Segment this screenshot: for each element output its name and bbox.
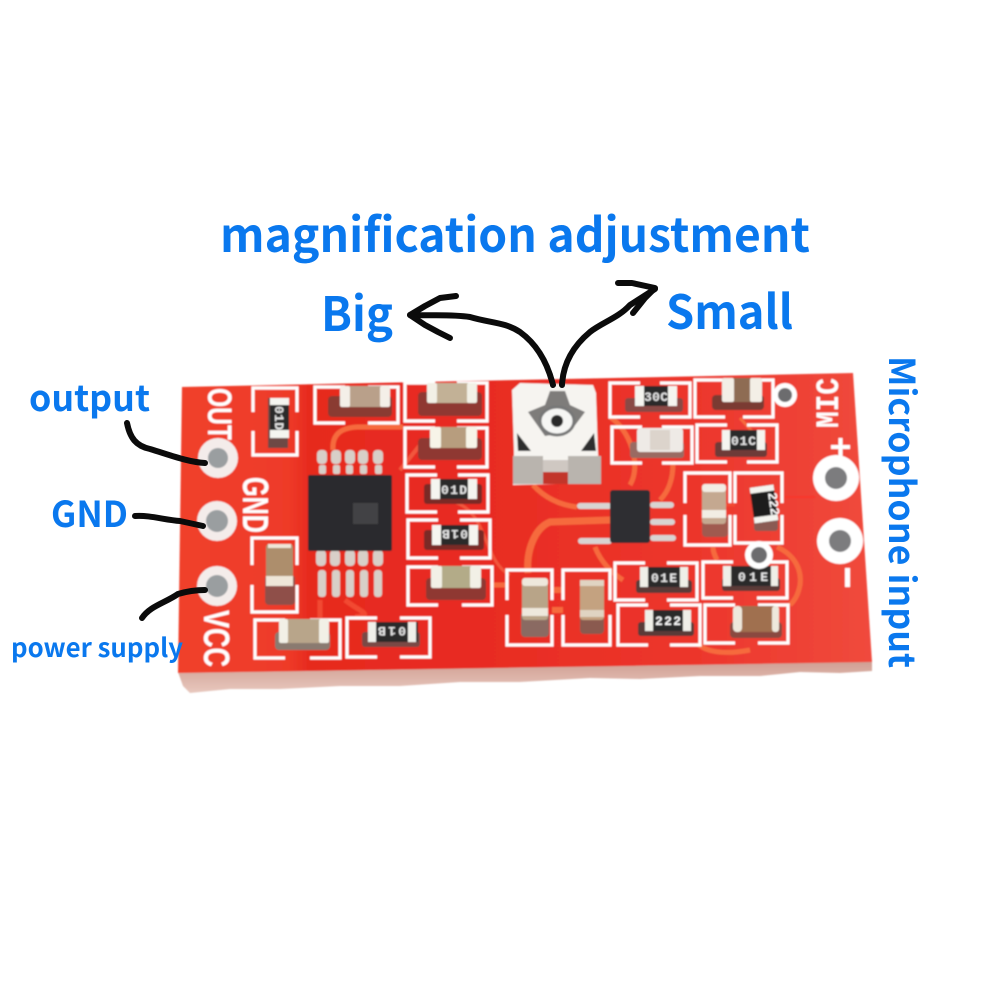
arrow: magnification small [562,283,655,385]
label: MIC: MIC [811,378,848,428]
top pins [317,450,383,474]
label: Microphone input: Microphone input [878,356,930,668]
label: plus [831,438,850,457]
chip: main IC [308,450,392,597]
label: GND: GND [235,477,276,533]
capacitor 3 [418,427,482,460]
hole: GND [197,501,237,541]
capacitor 2 [418,383,482,416]
arrow: output [127,423,205,463]
pad outlines [252,380,788,658]
resistor 01C [715,430,767,457]
hole: MIC minus [817,518,863,564]
resistor 01C: 01C [731,434,756,449]
copper traces [320,417,815,652]
arrow: power supply [142,590,205,618]
via lower [745,541,773,569]
resistor 01E right: 01E [738,570,768,585]
label: OUT: OUT [200,388,238,440]
label: GND: GND [51,486,128,538]
logo mark [353,503,378,524]
capacitor bottom right [730,606,782,638]
resistor 01D: 01D [441,483,467,498]
silk labels [196,378,850,667]
label: VCC: VCC [196,610,237,667]
resistor 01B: 01B [442,526,468,541]
capacitor vertical left [265,544,295,605]
hole: VCC [197,566,237,606]
arrow: magnification big [410,296,553,385]
solder holes [197,383,863,606]
resistor 30C: 30C [644,390,668,405]
resistor 222 vertical [750,485,782,531]
resistor 01E right [722,566,780,591]
resistor 1BC: 01B [378,623,406,638]
label: power supply: power supply [11,628,183,665]
label: Big: Big [321,276,393,345]
resistor 01D vertical: 01D [271,406,286,430]
hole: OUT [198,438,238,478]
resistor 222: 222 [655,614,681,629]
resistor 30C [625,386,683,412]
resistor 01D vertical [268,398,289,448]
capacitor lower left 1 [521,578,549,637]
label: output: output [29,370,150,422]
hole: MIC plus [813,455,859,501]
capacitor 1 [328,386,392,417]
capacitor lower left 2 [580,580,604,634]
label: Small: Small [666,274,793,343]
board edge [178,660,872,693]
dark corners [517,433,596,451]
label: minus [845,568,850,587]
resistor 01E left [636,567,692,593]
resistor 1BC [362,622,420,647]
chip: SOT IC [577,490,676,544]
bottom pins [316,550,383,597]
heading: magnification adjustment: magnification adjustment [220,197,810,266]
resistor 222 [638,610,694,636]
capacitor 4 [426,566,486,600]
trimmer potentiometer [512,383,601,485]
resistor 01D [424,479,482,504]
resistor 222 vertical: 222 [764,491,782,517]
capacitor vertical center [702,484,728,537]
resistor 01E left: 01E [651,571,677,586]
metal legs [513,456,543,484]
via top [773,383,797,407]
arrow: GND [135,516,203,526]
board face [178,373,872,673]
capacitor bottom left [275,619,330,650]
resistor 01B [424,525,484,550]
panel: circuit board [178,373,872,693]
white capacitor [630,428,684,458]
capacitor top right [712,378,764,410]
